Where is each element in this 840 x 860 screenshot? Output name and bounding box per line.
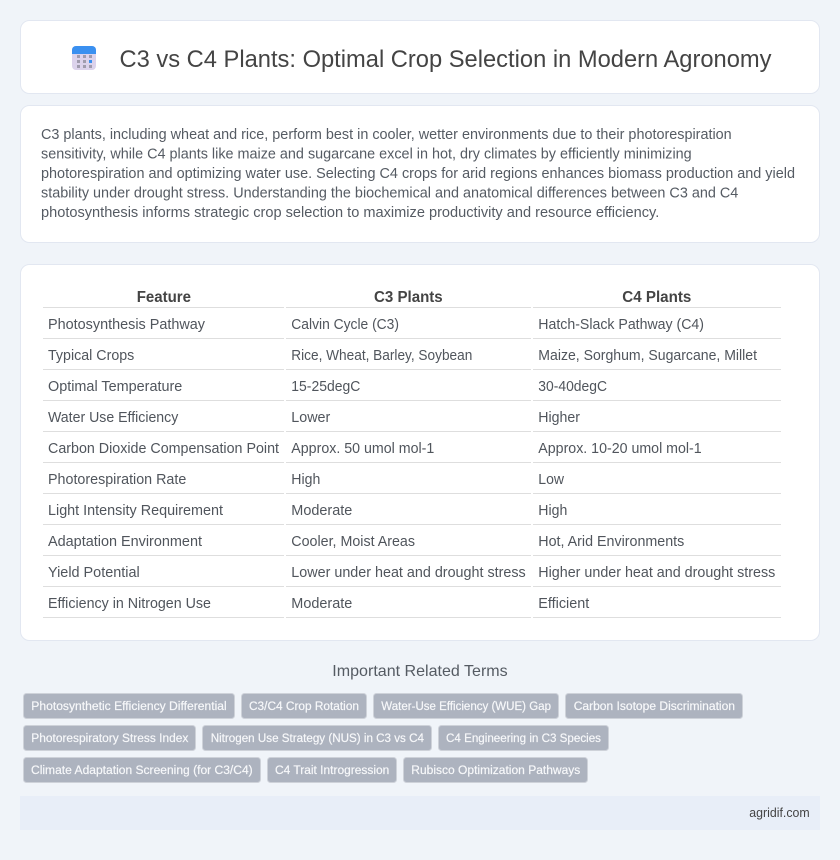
tag: C4 Trait Introgression (275, 763, 389, 777)
table row: typical crops (43, 348, 781, 370)
table row: yield potential: Yield Potential (48, 565, 140, 581)
title: C3 vs C4 Plants: Optimal Crop Selection in Modern Agronomy (120, 46, 772, 73)
panel: intro paragraph: sensitivity, while C4 plants like maize and sugarcane excel in hot, dry climates by efficiently minimizing (41, 146, 692, 162)
tag (202, 726, 432, 750)
table row: optimal temperature: 30-40degC (538, 379, 607, 395)
panel: related term tags (24, 694, 742, 782)
table row: light intensity requirement: Moderate (291, 503, 352, 519)
table row: efficiency in nitrogen use: Efficiency in Nitrogen Use (48, 596, 211, 612)
table row: water use efficiency: Lower (291, 410, 330, 426)
table row: light intensity requirement (43, 503, 781, 525)
table row: photorespiration rate: Low (538, 472, 565, 488)
table row: typical crops: Maize, Sorghum, Sugarcane, Millet (538, 348, 757, 364)
table row: efficiency in nitrogen use (43, 596, 781, 618)
table row: optimal temperature: Optimal Temperature (48, 379, 182, 395)
tag (438, 726, 608, 750)
icon: calendar (72, 46, 96, 70)
table row: adaptation environment (43, 534, 781, 556)
table row: efficiency in nitrogen use: Moderate (291, 596, 352, 612)
tag: Carbon Isotope Discrimination (574, 699, 735, 713)
table row: photosynthesis pathway: Photosynthesis Pathway (48, 317, 206, 333)
table row: carbon dioxide compensation point: Carbon Dioxide Compensation Point (48, 441, 279, 457)
panel: intro paragraph: C3 plants, including wheat and rice, perform best in cooler, wetter environments due to their photorespiration (41, 127, 732, 143)
tag: Climate Adaptation Screening (for C3/C4) (31, 763, 253, 777)
table row: carbon dioxide compensation point: Approx. 10-20 umol mol-1 (538, 441, 702, 457)
table header row: C4 Plants (622, 289, 691, 306)
table header row: Feature (137, 289, 191, 306)
tag: Rubisco Optimization Pathways (411, 763, 580, 777)
table row: light intensity requirement: Light Intensity Requirement (48, 503, 223, 519)
tag: Water-Use Efficiency (WUE) Gap (381, 699, 551, 713)
table row: adaptation environment: Cooler, Moist Areas (291, 534, 415, 550)
table row: light intensity requirement: High (538, 503, 567, 519)
tag (242, 694, 366, 718)
panel: intro paragraph: photorespiration and optimizing water use. Selecting C4 crops for arid regions enhances biomass production and yield (41, 166, 795, 182)
tag: Nitrogen Use Strategy (NUS) in C3 vs C4 (211, 731, 424, 745)
tag (24, 694, 234, 718)
table row: optimal temperature: 15-25degC (291, 379, 360, 395)
table row: typical crops: Rice, Wheat, Barley, Soybean (291, 348, 472, 364)
tag: Photosynthetic Efficiency Differential (31, 699, 227, 713)
panel: comparison table (20, 264, 820, 640)
heading: important related terms: Important Related Terms (332, 663, 508, 680)
table row: water use efficiency: Higher (538, 410, 580, 426)
table row: typical crops: Typical Crops (48, 348, 134, 364)
tag: C3/C4 Crop Rotation (249, 699, 359, 713)
table row: yield potential: Higher under heat and drought stress (538, 565, 775, 581)
table row: photorespiration rate: High (291, 472, 320, 488)
tag (24, 758, 260, 782)
tag (268, 758, 396, 782)
panel: header (20, 20, 820, 94)
table header row (43, 289, 781, 308)
table row: adaptation environment: Adaptation Environment (48, 534, 202, 550)
table row: carbon dioxide compensation point (43, 441, 781, 463)
tag (24, 726, 196, 750)
table row: adaptation environment: Hot, Arid Environments (538, 534, 684, 550)
table row: yield potential (43, 565, 781, 587)
table row: photorespiration rate (43, 472, 781, 494)
tag (374, 694, 558, 718)
panel: intro paragraph: photosynthesis informs strategic crop selection to maximize productivity and resource efficiency. (41, 205, 659, 221)
panel: intro paragraph: stability under drought stress. Understanding the biochemical and anatomical differences between C3 and C4 (41, 186, 738, 202)
footer (20, 796, 820, 830)
footer: agridif.com (749, 805, 810, 820)
table row: optimal temperature (43, 379, 781, 401)
table row: photosynthesis pathway: Calvin Cycle (C3) (291, 317, 399, 333)
table row: water use efficiency (43, 410, 781, 432)
table row: photorespiration rate: Photorespiration Rate (48, 472, 186, 488)
tag (566, 694, 742, 718)
table row: carbon dioxide compensation point: Approx. 50 umol mol-1 (291, 441, 434, 457)
table row: efficiency in nitrogen use: Efficient (538, 596, 589, 612)
table row: yield potential: Lower under heat and drought stress (291, 565, 526, 581)
table header row: C3 Plants (374, 289, 443, 306)
tag: C4 Engineering in C3 Species (446, 731, 601, 745)
tag: Photorespiratory Stress Index (31, 731, 189, 745)
table row: water use efficiency: Water Use Efficiency (48, 410, 179, 426)
table row: photosynthesis pathway: Hatch-Slack Pathway (C4) (538, 317, 704, 333)
table row: photosynthesis pathway (43, 317, 781, 339)
panel: intro paragraph (20, 106, 820, 242)
tag (404, 758, 588, 782)
